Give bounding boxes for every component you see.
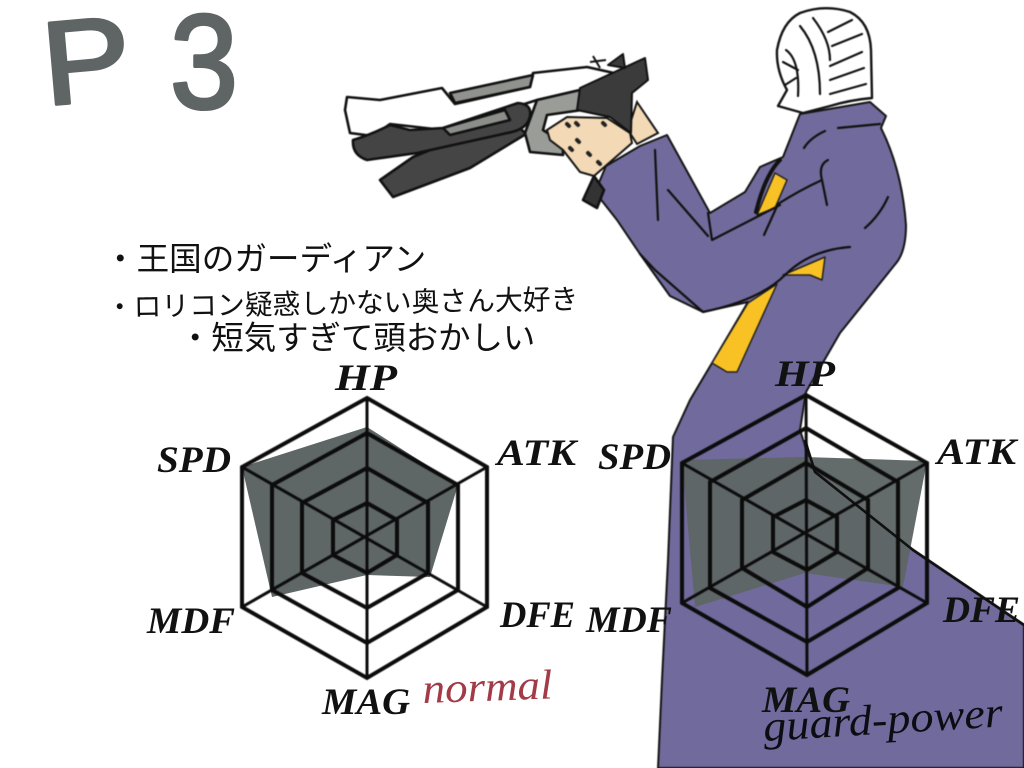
axis labels: SPD <box>598 437 671 478</box>
axis labels: MDF <box>585 600 672 641</box>
yellow lining <box>712 173 825 372</box>
coat <box>595 102 1024 768</box>
axis labels: HP <box>774 354 835 395</box>
axis labels: DFE <box>942 590 1020 631</box>
gun rear block <box>577 54 648 133</box>
axis labels <box>585 354 1020 721</box>
gun <box>345 67 614 208</box>
text block: character notes: ・王国のガーディアン <box>104 240 426 277</box>
radar chart: guard-power <box>585 354 1024 721</box>
web <box>682 395 927 675</box>
label: normal: normal <box>422 662 553 713</box>
illustration: guardian figure with gun <box>345 8 1024 768</box>
rear hand <box>628 102 658 144</box>
axis labels: DFE <box>499 595 575 636</box>
axis labels: SPD <box>157 440 231 481</box>
axis labels <box>146 358 579 723</box>
radar chart: normal <box>146 358 579 723</box>
web <box>242 398 487 678</box>
coat fold lines <box>640 124 888 312</box>
data polygon <box>682 457 927 607</box>
helmet <box>777 8 872 113</box>
axis labels: MDF <box>146 601 235 642</box>
axis labels: ATK <box>935 432 1019 473</box>
coat hem line <box>805 440 1024 625</box>
data polygon <box>242 427 458 597</box>
title: P3 <box>37 0 238 137</box>
hand <box>547 117 632 176</box>
axis labels: MAG <box>321 682 410 723</box>
axis labels: HP <box>334 358 397 399</box>
text block: character notes: ・短気すぎて頭おかしい <box>179 320 535 356</box>
axis labels: MAG <box>761 680 850 721</box>
text block: character notes: ・ロリコン疑惑しかない奥さん大好き <box>106 284 579 323</box>
text block: character notes <box>104 240 579 356</box>
label: guard-power: guard-power <box>762 689 1004 751</box>
axis labels: ATK <box>495 433 579 474</box>
